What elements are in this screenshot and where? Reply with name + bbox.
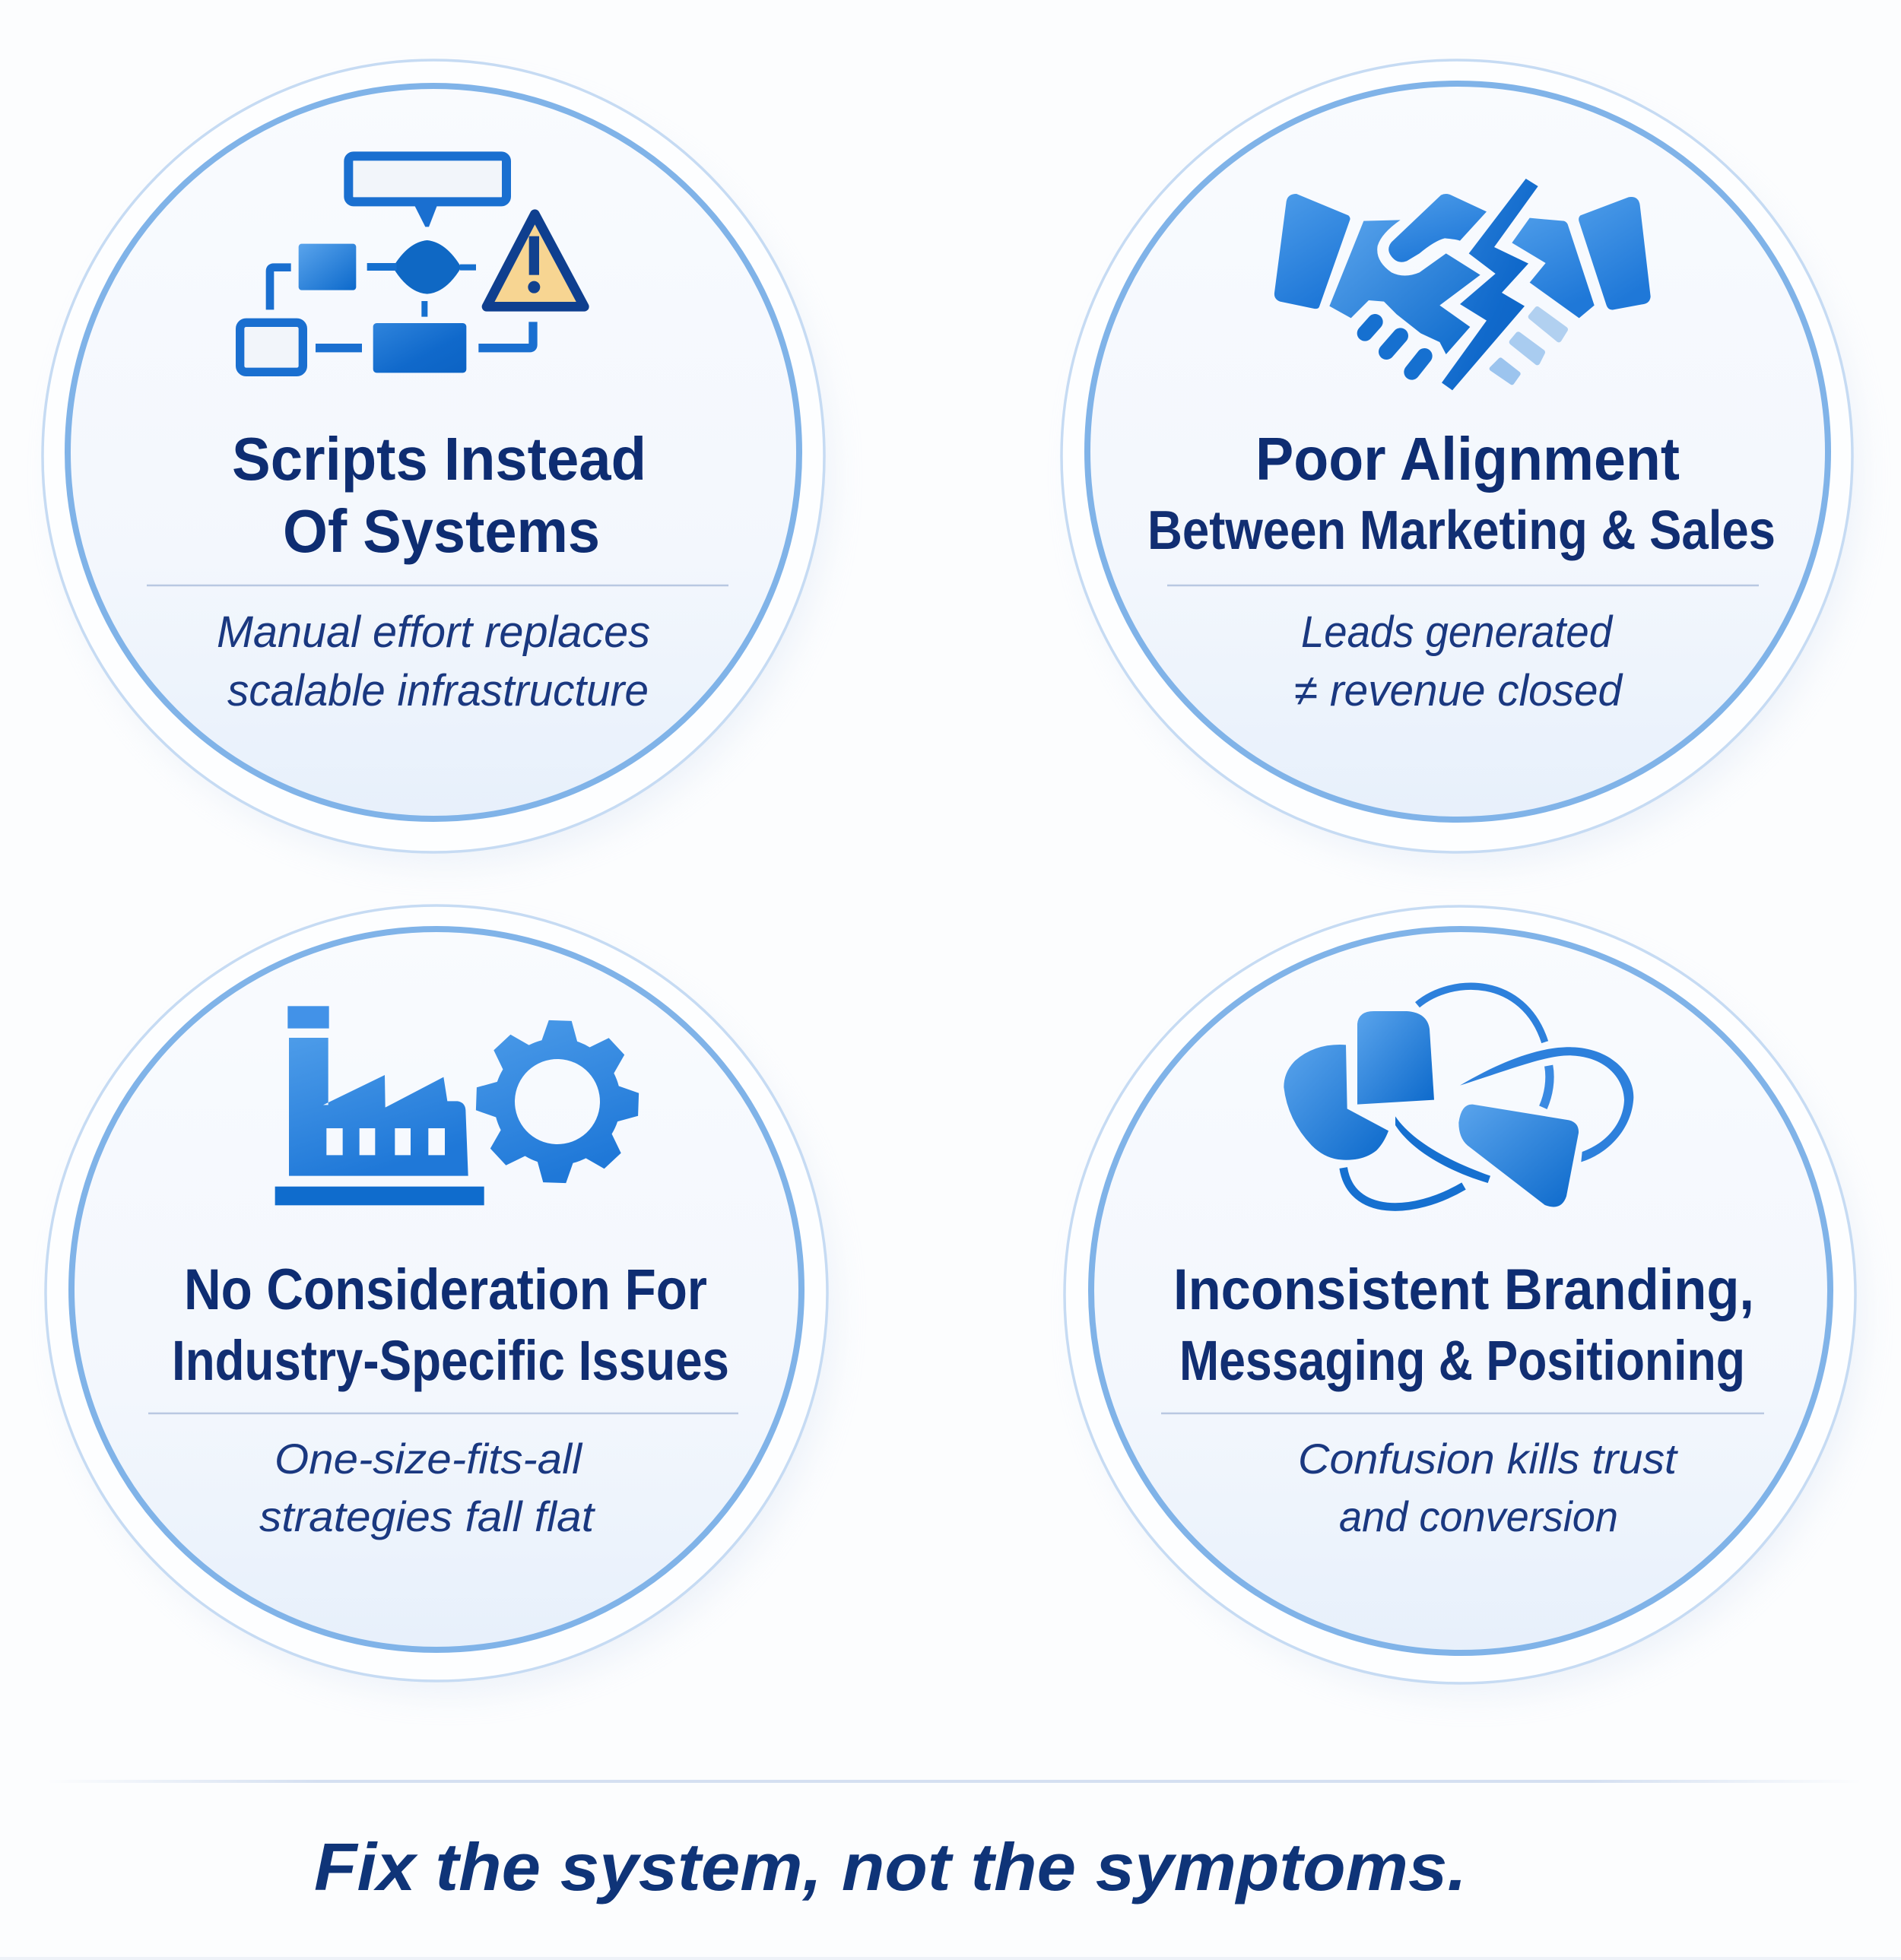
caption: leads generated: ≠ revenue closed <box>1294 666 1623 715</box>
panel: inconsistent branding <box>1065 906 1860 1693</box>
caption: confusion kills trust: and conversion <box>1339 1492 1618 1540</box>
panel: scripts instead of systems <box>43 60 829 863</box>
caption: manual effort: scalable infrastructure <box>227 666 649 715</box>
caption: one-size-fits-all <box>259 1435 596 1540</box>
panel: poor alignment <box>1062 60 1857 863</box>
panel: poor alignment: Between Marketing & Sales <box>1147 500 1776 561</box>
caption: confusion kills trust <box>1298 1435 1679 1540</box>
icon: factory and gear <box>275 1006 641 1205</box>
footer tagline: Fix the system, not the symptoms. <box>314 1829 1467 1904</box>
caption: confusion kills trust: Confusion kills trust <box>1298 1435 1679 1483</box>
icon: flowchart with warning <box>240 156 584 373</box>
caption: one-size-fits-all: One-size-fits-all <box>275 1435 583 1483</box>
caption: leads generated <box>1294 607 1623 715</box>
heading: scripts instead of systems: Scripts Instead <box>232 425 646 493</box>
panel: no consideration for industry <box>46 905 833 1692</box>
panel: no consideration for industry: Industry-Specific Issues <box>172 1329 729 1392</box>
panel: inconsistent branding: Messaging & Positioning <box>1179 1329 1745 1392</box>
heading: poor alignment: Poor Alignment <box>1255 425 1680 493</box>
icon: broken handshake <box>1274 179 1651 390</box>
icon: fragmented shapes <box>1284 986 1633 1207</box>
caption: manual effort: Manual effort replaces <box>217 607 650 657</box>
caption: one-size-fits-all: strategies fall flat <box>259 1492 596 1540</box>
heading: no consideration: No Consideration For <box>184 1258 707 1322</box>
caption: leads generated: Leads generated <box>1301 607 1614 657</box>
panel: scripts instead of systems: Of Systems <box>283 497 600 565</box>
caption: manual effort <box>217 607 650 715</box>
heading: inconsistent branding: Inconsistent Branding, <box>1173 1258 1754 1322</box>
